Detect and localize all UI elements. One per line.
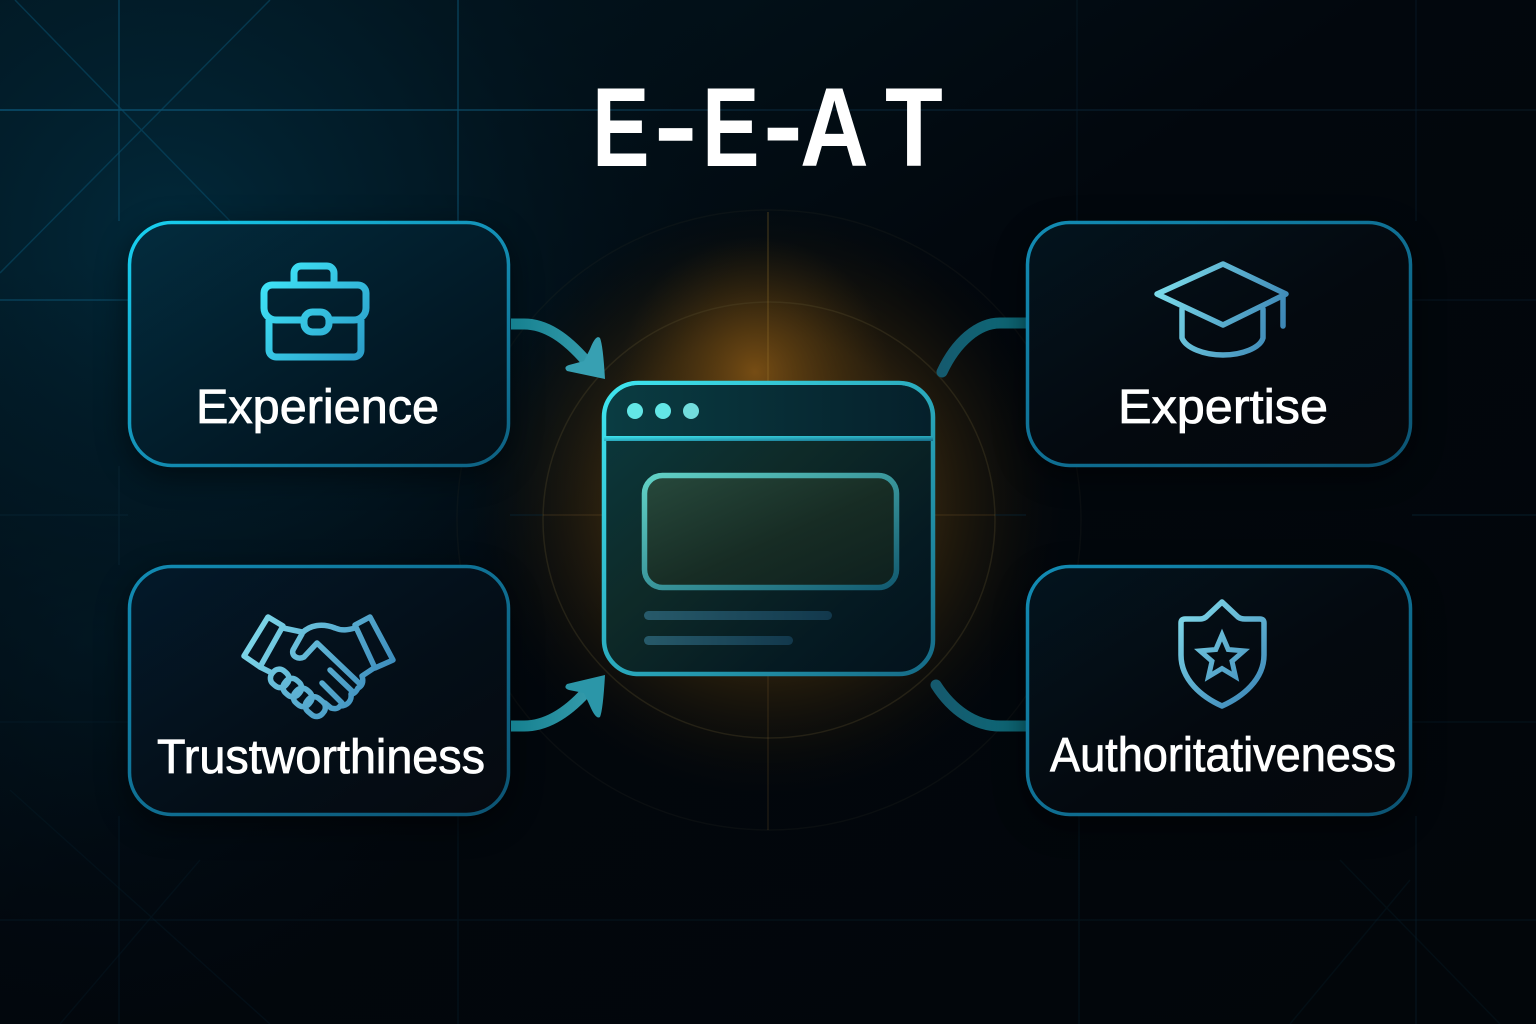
label: Expertise: Expertise: [1118, 381, 1328, 434]
window dots: [627, 403, 699, 419]
title: -: [763, 66, 803, 185]
arrow: Trustworthiness to page: [511, 675, 605, 726]
panel: Expertise: [1026, 222, 1412, 475]
text line placeholders: [644, 611, 832, 645]
title: [592, 64, 943, 191]
label: Authoritativeness: Authoritativeness: [1050, 729, 1396, 782]
panel: Authoritativeness: [1026, 566, 1412, 825]
title: -: [654, 66, 698, 185]
content image placeholder: [644, 476, 896, 588]
central browser window: [604, 383, 933, 674]
icon: handshake: [244, 617, 393, 720]
label: Trustworthiness: Trustworthiness: [157, 731, 485, 784]
panel: Trustworthiness: [128, 566, 510, 825]
arrow: Experience to page: [511, 324, 605, 379]
title: E: [592, 66, 650, 191]
icon: graduation cap: [1157, 264, 1286, 355]
arrow: Expertise connector: [942, 323, 1034, 372]
panel: Experience: [128, 222, 510, 475]
title: T: [885, 64, 943, 190]
label: Experience: Experience: [196, 381, 439, 434]
browser header bar: [604, 385, 933, 441]
title: A: [800, 66, 869, 191]
title: E: [702, 66, 760, 191]
icon: shield with star: [1181, 602, 1264, 706]
icon: briefcase: [264, 266, 366, 357]
arrow: Authoritativeness connector: [936, 685, 1034, 726]
